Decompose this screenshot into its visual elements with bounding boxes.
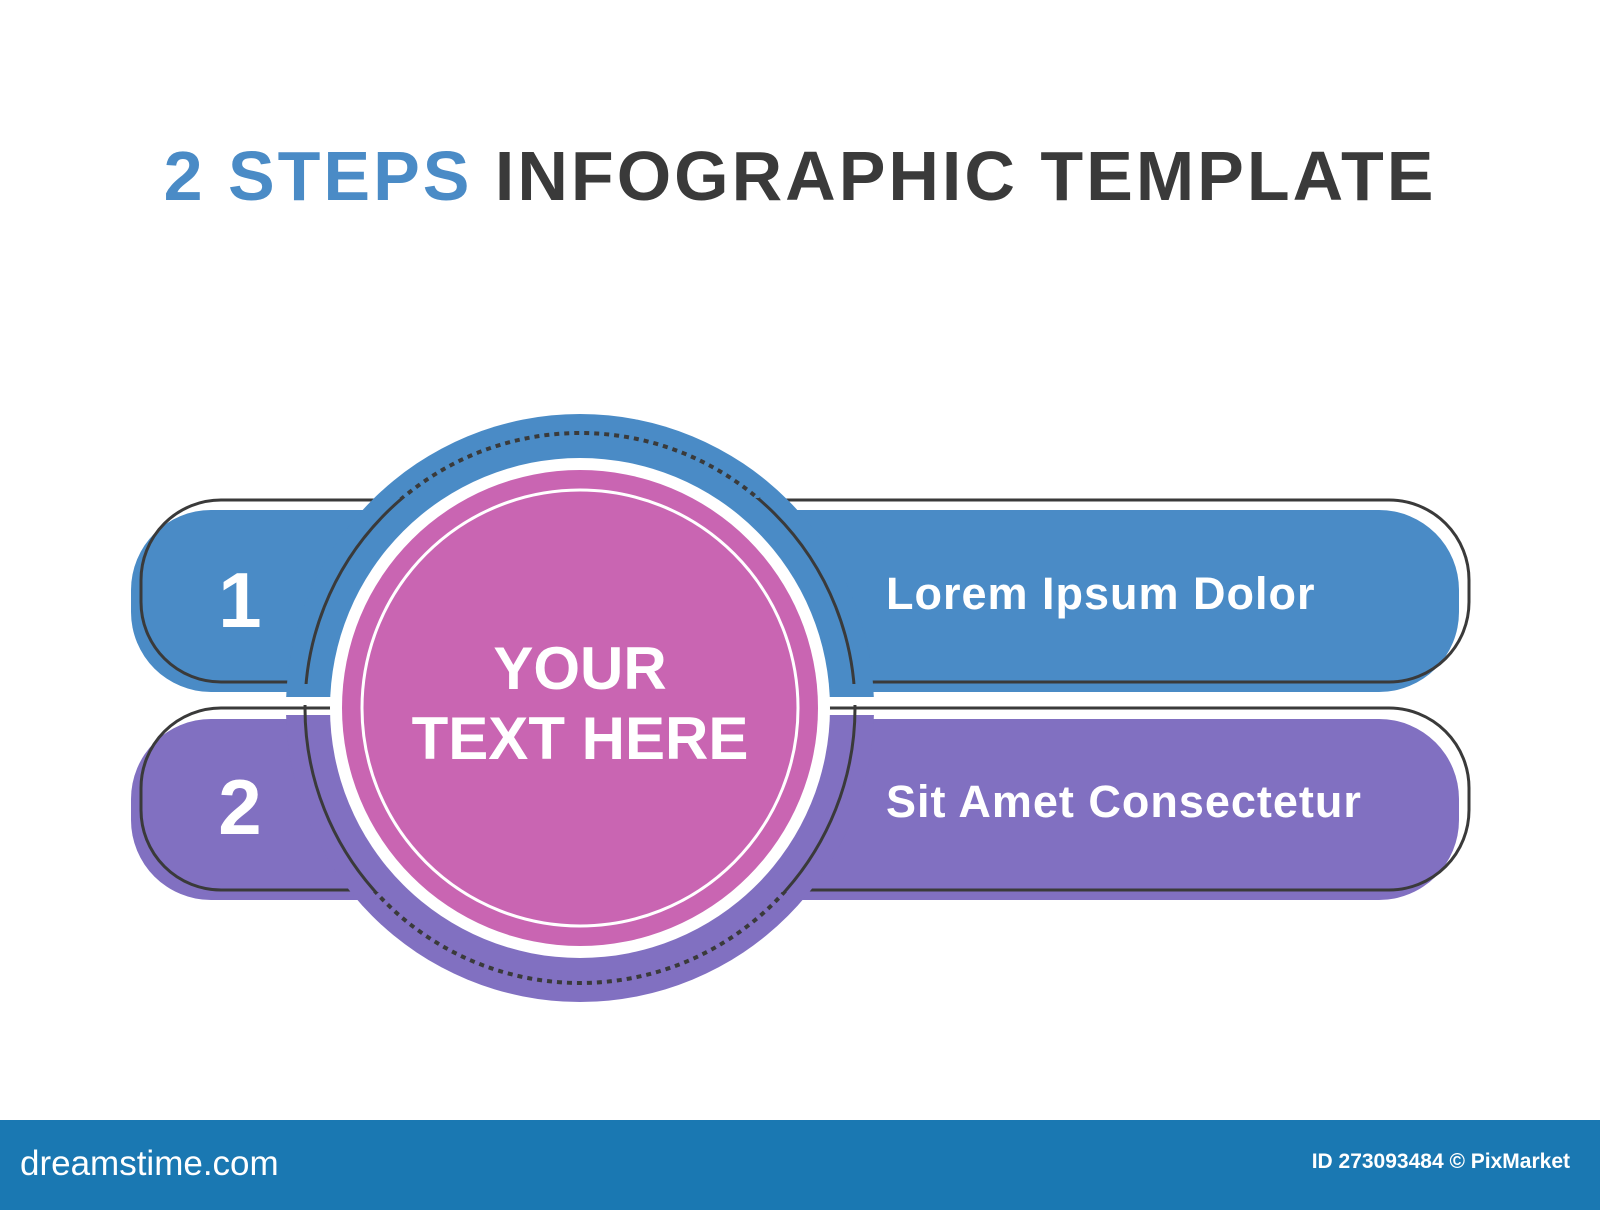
circle badge (286, 414, 874, 1002)
footer id: ID 273093484 © PixMarket (1312, 1150, 1570, 1173)
center text: TEXT HERE (412, 705, 748, 772)
step 1 text: Lorem Ipsum Dolor (886, 568, 1316, 619)
diagram (131, 414, 1470, 1002)
bar 1 (131, 500, 1469, 692)
number 1: 1 (218, 556, 262, 644)
center text (412, 635, 748, 772)
footer (0, 1120, 1600, 1210)
number 2: 2 (218, 763, 262, 851)
footer logo: dreamstime.com (20, 1144, 279, 1183)
bar 2 (131, 708, 1469, 900)
center text: YOUR (493, 635, 667, 702)
step 2 text: Sit Amet Consectetur (886, 776, 1362, 827)
title: 2 STEPS INFOGRAPHIC TEMPLATE (164, 137, 1436, 215)
